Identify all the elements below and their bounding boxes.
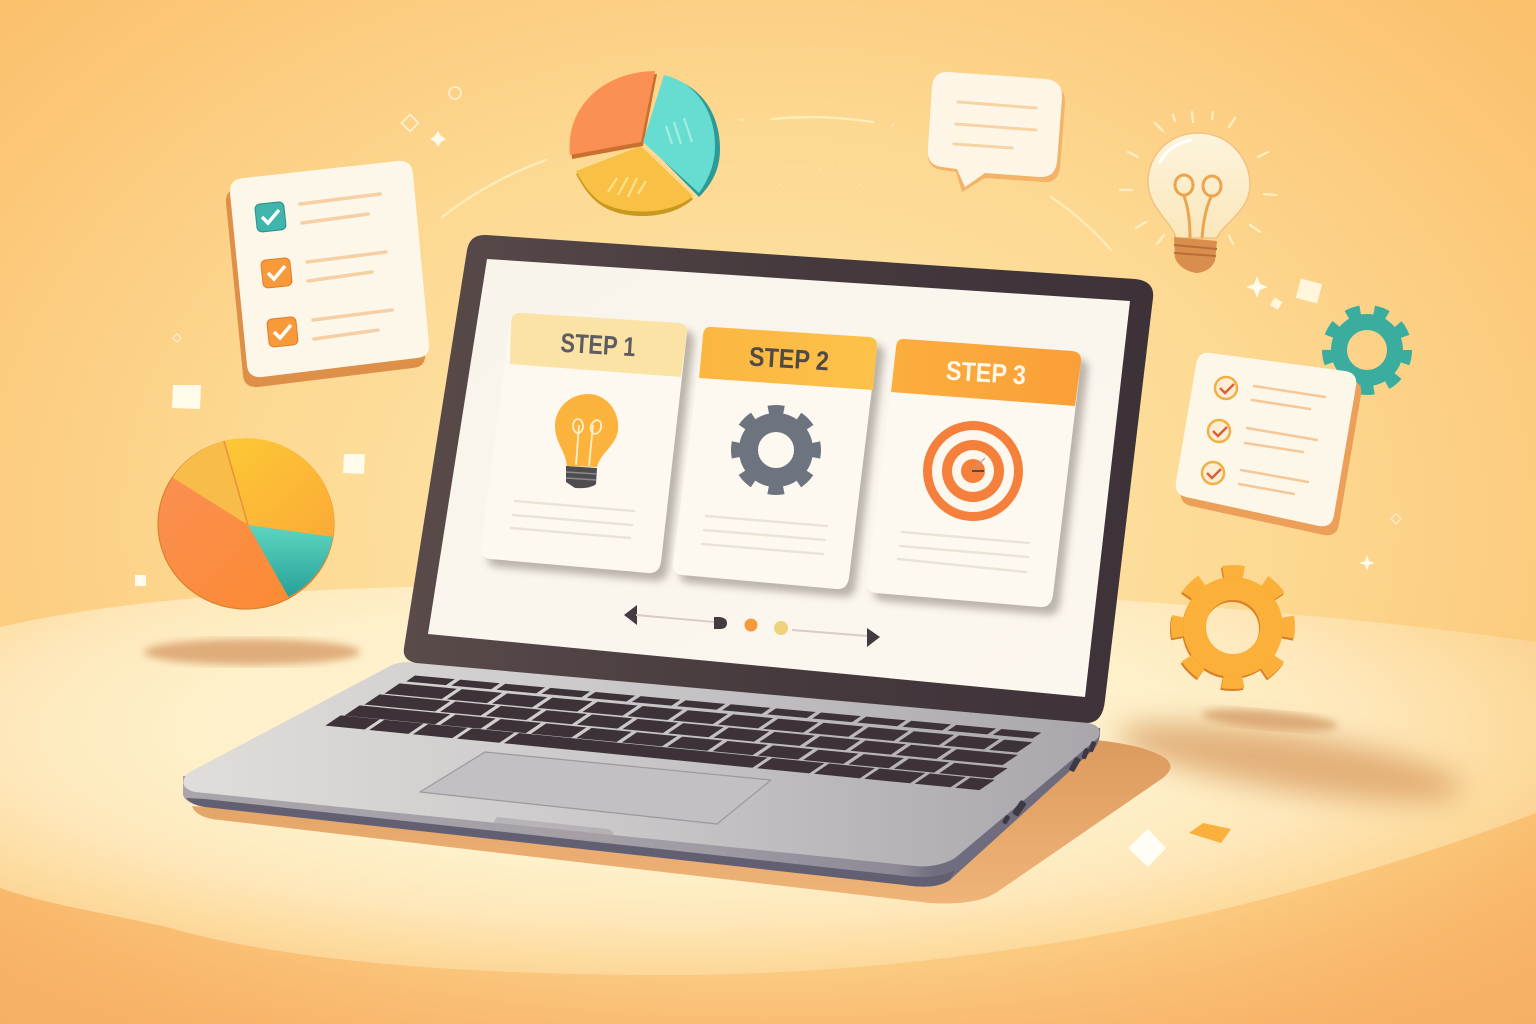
panel: step 3 card [867, 339, 1088, 615]
step 2 header [699, 327, 877, 390]
icon: left pie chart [158, 438, 334, 609]
step 3 label: STEP 3 [945, 356, 1027, 390]
step 1 label: STEP 1 [560, 328, 636, 362]
touchpad [420, 752, 771, 824]
laptop ground shadow [192, 707, 1467, 903]
laptop lid [404, 235, 1153, 723]
right arrow [792, 628, 880, 647]
icon: teal gear [1327, 310, 1407, 390]
panel: step 2 card [673, 327, 884, 597]
teal checkbox [255, 202, 286, 232]
step 2 label: STEP 2 [748, 342, 830, 376]
front notch [494, 817, 614, 842]
side ports [1002, 741, 1097, 825]
dark dot [714, 617, 727, 629]
step 1 header [510, 313, 687, 377]
panel: right checklist [1176, 353, 1361, 535]
decorative connecting arcs [442, 117, 1111, 250]
laptop [183, 235, 1153, 887]
pager navigation [624, 605, 880, 647]
keyboard [333, 678, 1042, 785]
icon: right light bulb [1120, 112, 1276, 273]
icon: gear [730, 404, 822, 496]
laptop screen [428, 259, 1130, 697]
icon: target [923, 421, 1023, 521]
laptop base side [183, 728, 1100, 887]
laptop deck [183, 662, 1100, 866]
check circles [1202, 377, 1237, 484]
panel: chat bubble [928, 72, 1065, 192]
orange checkbox 2 [267, 317, 298, 347]
teal slice [643, 75, 720, 197]
step 3 header [891, 339, 1081, 406]
icon: bulb [555, 394, 618, 488]
floor ellipse [0, 584, 1536, 975]
yellow slice [576, 146, 693, 216]
orange checkbox 1 [261, 258, 292, 288]
floating shadows [144, 639, 1339, 735]
icon: orange gear [1167, 562, 1298, 694]
sparkles and small squares [135, 87, 1401, 867]
yellow dot [774, 621, 788, 635]
panel: step 1 card [481, 313, 694, 581]
icon: top pie chart [570, 71, 720, 216]
left arrow [624, 605, 714, 625]
panel: left checklist [226, 161, 429, 387]
orange slice [570, 71, 657, 159]
orange dot [744, 618, 758, 632]
